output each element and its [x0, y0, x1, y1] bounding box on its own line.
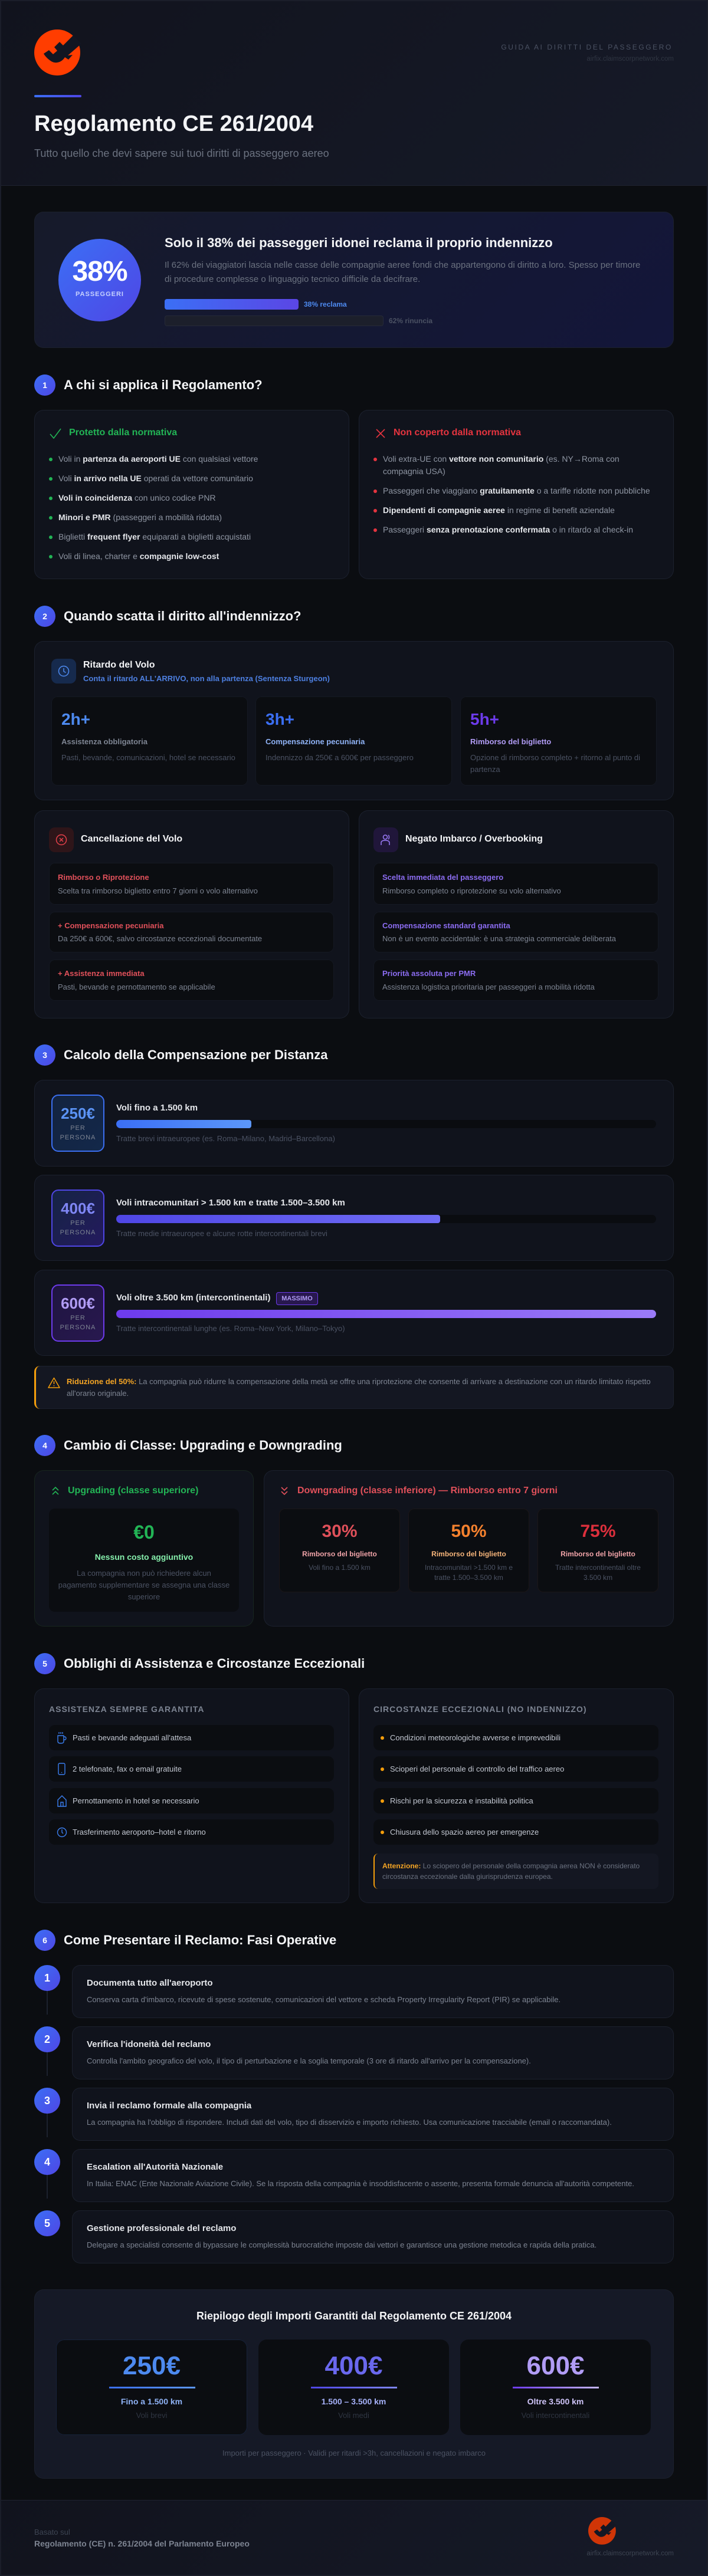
- description: Indennizzo da 250€ a 600€ per passeggero: [266, 753, 414, 762]
- bullet: [381, 1736, 384, 1740]
- panel: summary: [34, 2289, 674, 2479]
- option title: + Assistenza immediata: [58, 969, 145, 978]
- panel title: Upgrading (classe superiore): [68, 1486, 198, 1496]
- panel: 400 euro tier: [34, 1175, 674, 1261]
- label: Compensazione pecuniaria: [266, 737, 365, 746]
- card: 2h: [51, 696, 248, 786]
- step 1: Conserva carta d'imbarco, ricevute di spese sostenute, comunicazioni del vettore e scheda Property Irregularity Report (PIR) se applicabile.: [87, 1995, 560, 2004]
- logo: [34, 29, 80, 75]
- step 4: In Italia: ENAC (Ente Nazionale Aviazione Civile). Se la risposta della compagnia è insoddisfacente o assente, presenta formale denuncia all'autorità competente.: [87, 2179, 634, 2188]
- heading: section 6: Come Presentare il Reclamo: Fasi Operative: [64, 1933, 336, 1947]
- amount badge: [51, 1190, 104, 1247]
- stat value: 38%: [72, 256, 127, 287]
- result card: [49, 1509, 239, 1612]
- scope: 3.500 km: [584, 1573, 612, 1582]
- footer url: airfix.claimscorpnetwork.com: [586, 2550, 674, 2557]
- amount: 250€: [123, 2351, 181, 2380]
- summary card: 250: [56, 2340, 247, 2435]
- icon: warning: [48, 1378, 60, 1388]
- step 2: 2: [44, 2033, 50, 2045]
- step 5: Gestione professionale del reclamo: [87, 2223, 236, 2233]
- callout text: [382, 1862, 640, 1881]
- item text: Pasti e bevande adeguati all'attesa: [73, 1733, 191, 1742]
- item: Voli di linea, charter e compagnie low-cost: [58, 551, 219, 561]
- icon: cross: [376, 429, 385, 438]
- heading: section 4: [34, 1435, 342, 1456]
- option text: Scelta tra rimborso biglietto entro 7 giorni o volo alternativo: [58, 886, 258, 895]
- maximum tag: MASSIMO: [281, 1295, 313, 1302]
- amount caption: PER: [70, 1220, 86, 1227]
- summary card: 400: [258, 2340, 449, 2435]
- value: €0: [133, 1522, 155, 1543]
- tier title: Voli oltre 3.500 km (intercontinentali): [116, 1293, 270, 1303]
- heading: section 1: [34, 374, 263, 396]
- refund 50%: [408, 1509, 529, 1592]
- panel title: Negato Imbarco / Overbooking: [405, 834, 543, 844]
- heading: section 2: Quando scatta il diritto all'indennizzo?: [64, 609, 301, 623]
- step 3: Invia il reclamo formale alla compagnia: [87, 2101, 251, 2111]
- step 5: Delegare a specialisti consente di bypassare le complessità burocratiche imposte dai vettori e garantisce una gestione metodica e rapida della pratica.: [87, 2240, 596, 2249]
- amount caption: PERSONA: [60, 1324, 96, 1331]
- label: Rimborso del biglietto: [560, 1550, 635, 1558]
- tier title: Voli fino a 1.500 km: [116, 1103, 198, 1113]
- option title: Scelta immediata del passeggero: [382, 873, 503, 882]
- callout text: circostanza eccezionale dalla giurisprudenza europea.: [382, 1872, 553, 1881]
- type: Voli medi: [338, 2411, 369, 2420]
- divider: [109, 2387, 195, 2388]
- panel: 600 euro tier: [34, 1270, 674, 1356]
- item: transfer: [49, 1819, 334, 1845]
- step 4: Escalation all'Autorità Nazionale: [87, 2162, 223, 2172]
- option text: Non è un evento accidentale: è una strategia commerciale deliberata: [382, 934, 616, 943]
- item: Passeggeri che viaggiano gratuitamente o a tariffe ridotte non pubbliche: [383, 486, 650, 495]
- summary title: Riepilogo degli Importi Garantiti dal Regolamento CE 261/2004: [196, 2310, 512, 2322]
- heading: section 5: [34, 1653, 365, 1674]
- amount caption: PERSONA: [60, 1134, 96, 1141]
- heading: section 5: 5: [42, 1659, 47, 1668]
- heading: section 4: 4: [42, 1441, 47, 1450]
- panel title: Downgrading (classe inferiore) — Rimborso entro 7 giorni: [297, 1486, 558, 1496]
- item: weather: [373, 1725, 658, 1750]
- amount caption: PER: [70, 1315, 86, 1322]
- amount: 250€: [61, 1105, 95, 1122]
- item: compagnia USA): [383, 466, 445, 476]
- item: security: [373, 1788, 658, 1813]
- callout text: Riduzione del 50%: La compagnia può ridurre la compensazione della metà se offre una riprotezione che consente di arrivare a destinazione con un ritardo limitato rispetto: [67, 1377, 651, 1386]
- scope: Voli fino a 1.500 km: [309, 1563, 371, 1572]
- bar: 38% reclama: [165, 299, 299, 310]
- site url: airfix.claimscorpnetwork.com: [586, 55, 674, 63]
- item: Voli in coincidenza con unico codice PNR: [58, 493, 216, 502]
- callout text: [67, 1377, 651, 1398]
- icon: phone: [58, 1763, 65, 1775]
- scope: tratte 1.500–3.500 km: [434, 1573, 503, 1582]
- refund 75%: [537, 1509, 658, 1592]
- scope: Tratte intercontinentali oltre: [555, 1563, 641, 1572]
- panel: not covered: [359, 410, 674, 579]
- icon: chevrons up: [52, 1487, 59, 1495]
- item: Voli in partenza da aeroporti UE con qualsiasi vettore: [58, 454, 258, 464]
- callout: 50% reduction: [34, 1366, 674, 1409]
- summary card: 600: [460, 2340, 651, 2435]
- footer logo: [588, 2517, 617, 2545]
- step 2: [34, 2026, 674, 2079]
- value: 3h+: [266, 710, 294, 728]
- amount caption: [60, 1315, 96, 1331]
- option text: Rimborso completo o riprotezione su volo alternativo: [382, 886, 561, 895]
- value: 5h+: [470, 710, 499, 728]
- panel: protected: [34, 410, 349, 579]
- amount caption: [60, 1125, 96, 1141]
- panel: cancellation: [34, 810, 349, 1018]
- panel: denied boarding: [359, 810, 674, 1018]
- step 3: La compagnia ha l'obbligo di rispondere. Includi dati del volo, tipo di disservizio e importo richiesto. Usa comunicazione tracciabile (email o raccomandata).: [87, 2118, 612, 2127]
- icon: cup: [57, 1732, 67, 1744]
- option: choice: [373, 863, 658, 905]
- heading: section 3: Calcolo della Compensazione per Distanza: [64, 1047, 327, 1062]
- item text: Rischi per la sicurezza e instabilità politica: [390, 1796, 533, 1805]
- bar: 62% rinuncia: [165, 316, 384, 326]
- item text: Chiusura dello spazio aereo per emergenze: [390, 1828, 539, 1836]
- source label: Basato sul: [34, 2528, 70, 2536]
- item text: Condizioni meteorologiche avverse e imprevedibili: [390, 1733, 560, 1742]
- tier title: Voli intracomunitari > 1.500 km e tratte 1.500–3.500 km: [116, 1198, 345, 1208]
- step 4: 4: [44, 2156, 50, 2168]
- card: 3h: [255, 696, 452, 786]
- bullet: [381, 1799, 384, 1803]
- option: compensation: [373, 912, 658, 952]
- step 2: Controlla l'ambito geografico del volo, il tipo di perturbazione e la soglia temporale (3 ore di ritardo all'arrivo per la compensazione).: [87, 2056, 531, 2065]
- subtitle: Tutto quello che devi sapere sui tuoi diritti di passeggero aereo: [34, 147, 329, 159]
- guide label: GUIDA AI DIRITTI DEL PASSEGGERO: [501, 43, 673, 51]
- label: Rimborso del biglietto: [302, 1550, 377, 1558]
- bar label: 62%: 62% rinuncia: [389, 317, 432, 325]
- type: Voli brevi: [136, 2411, 167, 2420]
- icon: clock: [51, 659, 76, 684]
- heading: section 2: [34, 606, 301, 627]
- stat caption: PASSEGGERI: [76, 291, 124, 298]
- item: hotel: [49, 1788, 334, 1813]
- bar chart: 100%: [116, 1310, 656, 1318]
- option title: + Compensazione pecuniaria: [58, 921, 164, 930]
- scope: Intracomunitari >1.500 km e: [425, 1563, 513, 1572]
- heading: section 6: [34, 1930, 336, 1951]
- panel title: Non coperto dalla normativa: [394, 428, 521, 438]
- percentage: 30%: [322, 1522, 358, 1541]
- description: Pasti, bevande, comunicazioni, hotel se necessario: [61, 753, 235, 762]
- heading: section 5: Obblighi di Assistenza e Circostanze Eccezionali: [64, 1656, 365, 1671]
- hero text: di procedure complesse o linguaggio tecnico difficile da decifrare.: [165, 274, 420, 284]
- icon: check: [50, 428, 61, 439]
- panel: flight delay: [34, 641, 674, 800]
- icon: house: [57, 1795, 67, 1807]
- heading: section 4: Cambio di Classe: Upgrading e Downgrading: [64, 1438, 342, 1453]
- maximum tag: [276, 1292, 318, 1305]
- label: Rimborso del biglietto: [470, 737, 551, 746]
- amount badge: [51, 1284, 104, 1342]
- amount badge: [51, 1095, 104, 1152]
- amount caption: PERSONA: [60, 1229, 96, 1236]
- panel: hero statistic: [34, 212, 674, 348]
- heading: section 2: 2: [42, 612, 47, 621]
- step 1: Documenta tutto all'aeroporto: [87, 1978, 213, 1988]
- item: [373, 454, 620, 476]
- amount: 400€: [325, 2351, 382, 2380]
- callout text: all'orario originale.: [67, 1389, 129, 1398]
- callout: attention: [373, 1854, 658, 1889]
- option: priority: [373, 960, 658, 1001]
- bullet: [381, 1831, 384, 1834]
- panel title: Cancellazione del Volo: [81, 834, 182, 844]
- result text: superiore: [128, 1592, 160, 1601]
- tier text: Tratte intercontinentali lunghe (es. Roma–New York, Milano–Tokyo): [116, 1324, 345, 1333]
- option title: Rimborso o Riprotezione: [58, 873, 149, 882]
- panel title: ASSISTENZA SEMPRE GARANTITA: [49, 1704, 204, 1714]
- option: refund: [49, 863, 334, 905]
- icon: person: [373, 827, 398, 852]
- option title: Compensazione standard garantita: [382, 921, 510, 930]
- option text: Assistenza logistica prioritaria per passeggeri a mobilità ridotta: [382, 983, 595, 991]
- item: strikes: [373, 1756, 658, 1782]
- heading: section 6: 6: [42, 1936, 47, 1945]
- card: 5h: [460, 696, 657, 786]
- result text: pagamento supplementare se assegna una classe: [58, 1581, 230, 1589]
- icon: cancelled: [49, 827, 74, 852]
- heading: section 1: A chi si applica il Regolamento?: [64, 377, 263, 392]
- step 3: [34, 2088, 674, 2141]
- label: Assistenza obbligatoria: [61, 737, 148, 746]
- result label: Nessun costo aggiuntivo: [95, 1552, 193, 1562]
- panel title: Ritardo del Volo: [83, 660, 155, 670]
- list: protected: [49, 454, 258, 561]
- option title: Priorità assoluta per PMR: [382, 969, 476, 978]
- percentage: 75%: [580, 1522, 616, 1541]
- result text: La compagnia non può richiedere alcun: [77, 1569, 211, 1578]
- panel: assistance: [34, 1688, 349, 1903]
- label: Rimborso del biglietto: [431, 1550, 506, 1558]
- step 3: 3: [44, 2095, 50, 2107]
- summary note: Importi per passeggero · Validi per ritardi >3h, cancellazioni e negato imbarco: [222, 2449, 486, 2457]
- item text: Trasferimento aeroporto–hotel e ritorno: [73, 1828, 206, 1836]
- panel: exceptional circumstances: [359, 1688, 674, 1903]
- source title: Regolamento (CE) n. 261/2004 del Parlamento Europeo: [34, 2539, 250, 2548]
- range: 1.500 – 3.500 km: [322, 2397, 386, 2406]
- item: meals: [49, 1725, 334, 1750]
- range: Oltre 3.500 km: [527, 2397, 584, 2406]
- item text: 2 telefonate, fax o email gratuite: [73, 1765, 182, 1773]
- panel title: CIRCOSTANZE ECCEZIONALI (NO INDENNIZZO): [373, 1704, 587, 1714]
- item: Dipendenti di compagnie aeree in regime di benefit aziendale: [383, 505, 615, 515]
- percentage: 50%: [451, 1522, 487, 1541]
- option: assistance: [49, 960, 334, 1001]
- divider: [513, 2387, 599, 2388]
- divider: [311, 2387, 397, 2388]
- bullet: [381, 1767, 384, 1771]
- item: phone: [49, 1756, 334, 1782]
- icon: chevrons down: [281, 1487, 288, 1495]
- option text: Da 250€ a 600€, salvo circostanze eccezionali documentate: [58, 934, 262, 943]
- item: airspace: [373, 1819, 658, 1845]
- step 5: [34, 2210, 674, 2263]
- amount: 400€: [61, 1200, 95, 1217]
- hero heading: Solo il 38% dei passeggeri idonei reclama il proprio indennizzo: [165, 235, 553, 250]
- tier text: Tratte medie intraeuropee e alcune rotte intercontinentali brevi: [116, 1229, 327, 1238]
- stat circle: [58, 239, 141, 321]
- bar label: 38%: 38% reclama: [304, 300, 347, 308]
- panel: 250 euro tier: [34, 1080, 674, 1167]
- footer: [0, 2500, 708, 2576]
- type: Voli intercontinentali: [522, 2411, 589, 2420]
- heading: section 3: 3: [42, 1050, 47, 1060]
- panel: upgrading: [34, 1470, 254, 1627]
- item: Passeggeri senza prenotazione confermata o in ritardo al check-in: [383, 525, 633, 534]
- title: Regolamento CE 261/2004: [34, 111, 313, 136]
- tier text: Tratte brevi intraeuropee (es. Roma–Milano, Madrid–Barcellona): [116, 1134, 335, 1143]
- callout text: Attenzione: Lo sciopero del personale della compagnia aerea NON è considerato: [382, 1862, 640, 1870]
- option text: Pasti, bevande e pernottamento se applicabile: [58, 983, 215, 991]
- hero text: [165, 260, 640, 284]
- heading: section 1: 1: [42, 380, 47, 390]
- amount caption: PER: [70, 1125, 86, 1132]
- item: Minori e PMR (passeggeri a mobilità ridotta): [58, 512, 222, 522]
- list: not covered: [373, 454, 650, 534]
- header band: [0, 0, 708, 186]
- refund 30%: [279, 1509, 400, 1592]
- hero text: Il 62% dei viaggiatori lascia nelle casse delle compagnie aeree fondi che appartengono di diritto a loro. Spesso per timore: [165, 260, 640, 270]
- amount: 600€: [61, 1294, 95, 1312]
- item: Voli extra-UE con vettore non comunitario (es. NY→Roma con: [383, 454, 620, 464]
- step 2: Verifica l'idoneità del reclamo: [87, 2039, 211, 2049]
- icon: clock: [57, 1827, 67, 1838]
- bar chart: 60%: [116, 1215, 656, 1223]
- option: compensation: [49, 912, 334, 952]
- step 4: [34, 2149, 674, 2202]
- amount caption: [60, 1220, 96, 1236]
- bar chart: 25%: [116, 1120, 656, 1128]
- amount: 600€: [527, 2351, 584, 2380]
- step 1: 1: [44, 1972, 50, 1984]
- panel subtitle: Conta il ritardo ALL'ARRIVO, non alla partenza (Sentenza Sturgeon): [83, 674, 330, 683]
- description: Opzione di rimborso completo + ritorno al punto di: [470, 753, 640, 762]
- item text: Pernottamento in hotel se necessario: [73, 1796, 199, 1805]
- item: Biglietti frequent flyer equiparati a biglietti acquistati: [58, 532, 251, 541]
- value: 2h+: [61, 710, 90, 728]
- scope: [425, 1563, 513, 1582]
- step 1: [34, 1965, 674, 2018]
- panel title: Protetto dalla normativa: [69, 428, 177, 438]
- accent line: [34, 95, 81, 97]
- description: partenza: [470, 765, 500, 774]
- panel: downgrading: [264, 1470, 674, 1627]
- item text: Scioperi del personale di controllo del traffico aereo: [390, 1765, 564, 1773]
- range: Fino a 1.500 km: [121, 2397, 182, 2406]
- item: Voli in arrivo nella UE operati da vettore comunitario: [58, 474, 253, 483]
- scope: [555, 1563, 641, 1582]
- result text: [58, 1569, 230, 1601]
- step 5: 5: [44, 2217, 50, 2229]
- heading: section 3: [34, 1044, 328, 1066]
- description: [470, 753, 640, 774]
